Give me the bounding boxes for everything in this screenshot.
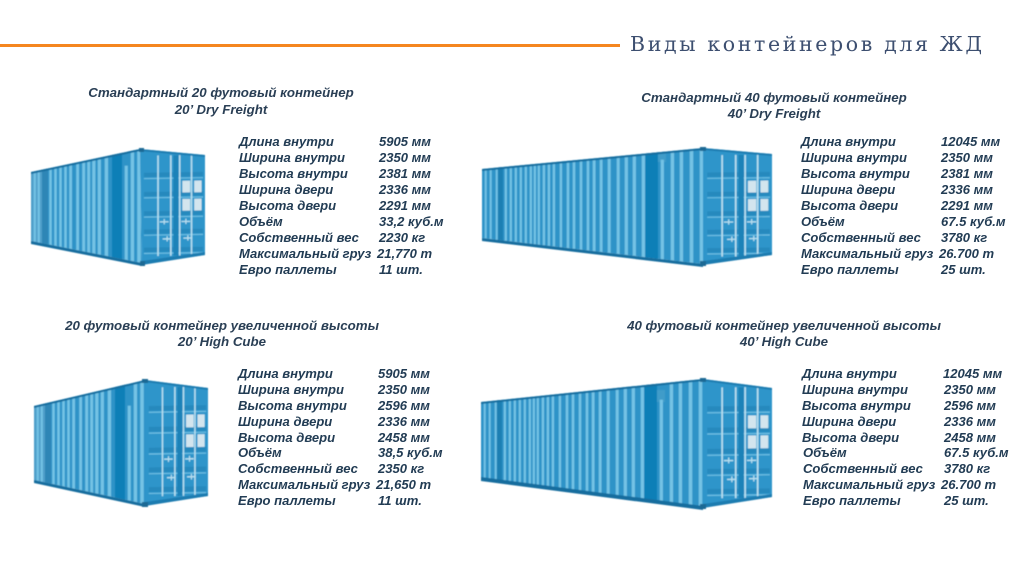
spec table: 20 ft high cube: 11 шт.: [378, 493, 422, 508]
panel: standard 20 ft container: [31, 85, 444, 277]
spec table: 40 ft high cube: 2350 мм: [943, 382, 996, 397]
panel: standard 40 ft container: [482, 90, 1006, 277]
spec table: standard 20 ft: [238, 134, 444, 277]
spec table: standard 20 ft: Ширина двери: [239, 182, 333, 197]
spec table: standard 40 ft: [800, 134, 1006, 277]
spec table: 20 ft high cube: 5905 мм: [378, 366, 430, 381]
spec table: standard 20 ft: Высота внутри: [239, 166, 348, 181]
heading: standard 40 ft: Стандартный 40 футовый контейнер: [641, 90, 907, 105]
spec table: standard 40 ft: 3780 кг: [941, 230, 987, 245]
spec table: 40 ft high cube: Объём: [803, 445, 847, 460]
spec table: standard 20 ft: Длина внутри: [238, 134, 334, 149]
spec table: standard 40 ft: 2291 мм: [940, 198, 993, 213]
spec table: standard 20 ft: Максимальный груз: [239, 246, 372, 261]
spec table: standard 40 ft: Собственный вес: [801, 230, 922, 245]
spec table: standard 20 ft: 5905 мм: [379, 134, 431, 149]
spec table: 20 ft high cube: Ширина внутри: [238, 382, 344, 397]
spec table: 40 ft high cube: 26.700 т: [940, 477, 997, 492]
spec table: standard 40 ft: 12045 мм: [941, 134, 1001, 149]
spec table: 20 ft high cube: Высота внутри: [238, 398, 347, 413]
header rule: [0, 44, 620, 47]
spec table: standard 40 ft: 2381 мм: [940, 166, 993, 181]
spec table: 20 ft high cube: 38,5 куб.м: [378, 445, 443, 460]
spec table: 20 ft high cube: 2350 кг: [377, 461, 424, 476]
spec table: 40 ft high cube: 67.5 куб.м: [944, 445, 1009, 460]
icon: 20 ft high cube container: [34, 379, 208, 510]
spec table: standard 40 ft: Евро паллеты: [801, 262, 899, 277]
spec table: 40 ft high cube: Ширина двери: [802, 414, 896, 429]
heading: standard 20 ft: 20’ Dry Freight: [174, 102, 268, 117]
spec table: 20 ft high cube: Собственный вес: [238, 461, 359, 476]
heading: standard 40 ft: 40’ Dry Freight: [727, 106, 821, 121]
spec table: standard 20 ft: Евро паллеты: [239, 262, 337, 277]
spec table: 40 ft high cube: 12045 мм: [943, 366, 1003, 381]
spec table: 40 ft high cube: Высота внутри: [802, 398, 911, 413]
spec table: 20 ft high cube: Объём: [238, 445, 282, 460]
spec table: 40 ft high cube: Высота двери: [802, 430, 899, 445]
heading: standard 20 ft: Стандартный 20 футовый контейнер: [88, 85, 354, 100]
spec table: 20 ft high cube: 2596 мм: [377, 398, 430, 413]
spec table: 40 ft high cube: Длина внутри: [801, 366, 897, 381]
spec table: 40 ft high cube: 3780 кг: [944, 461, 990, 476]
spec table: 20 ft high cube: [237, 366, 443, 508]
spec table: standard 20 ft: 2350 мм: [378, 150, 431, 165]
spec table: 20 ft high cube: 2336 мм: [377, 414, 430, 429]
heading: 20 ft high cube: 20’ High Cube: [177, 334, 267, 349]
spec table: 40 ft high cube: 2458 мм: [943, 430, 996, 445]
spec table: standard 20 ft: 2381 мм: [378, 166, 431, 181]
spec table: 40 ft high cube: Евро паллеты: [803, 493, 901, 508]
spec table: 20 ft high cube: 2350 мм: [377, 382, 430, 397]
heading: 20 ft high cube: 20 футовый контейнер увеличенной высоты: [64, 318, 380, 333]
heading: 40 ft high cube: 40 футовый контейнер увеличенной высоты: [626, 318, 942, 333]
spec table: 40 ft high cube: 25 шт.: [943, 493, 989, 508]
spec table: 20 ft high cube: Высота двери: [238, 430, 335, 445]
heading: 40 ft high cube: 40’ High Cube: [739, 334, 829, 349]
spec table: 40 ft high cube: 2596 мм: [943, 398, 996, 413]
spec table: standard 40 ft: Длина внутри: [800, 134, 896, 149]
spec table: standard 40 ft: 25 шт.: [940, 262, 986, 277]
spec table: standard 40 ft: 2350 мм: [940, 150, 993, 165]
spec table: standard 20 ft: 2230 кг: [378, 230, 425, 245]
spec table: 40 ft high cube: Ширина внутри: [802, 382, 908, 397]
icon: 40 ft container: [482, 140, 772, 270]
spec table: standard 20 ft: 11 шт.: [379, 262, 423, 277]
spec table: standard 40 ft: 26.700 т: [938, 246, 995, 261]
spec table: 20 ft high cube: Максимальный груз: [238, 477, 371, 492]
spec table: standard 20 ft: 21,770 т: [376, 246, 433, 261]
spec table: standard 40 ft: Максимальный груз: [801, 246, 934, 261]
spec table: standard 40 ft: Высота двери: [801, 198, 898, 213]
spec table: 20 ft high cube: 2458 мм: [377, 430, 430, 445]
spec table: 40 ft high cube: 2336 мм: [943, 414, 996, 429]
spec table: 40 ft high cube: Собственный вес: [803, 461, 924, 476]
panel: 20 ft high cube container: [34, 318, 443, 510]
title: Виды контейнеров для ЖД: [630, 32, 982, 56]
spec table: standard 20 ft: Объём: [239, 214, 283, 229]
panel: 40 ft high cube container: [481, 318, 1009, 510]
spec table: 20 ft high cube: Длина внутри: [237, 366, 333, 381]
spec table: standard 40 ft: Объём: [801, 214, 845, 229]
spec table: 20 ft high cube: Ширина двери: [238, 414, 332, 429]
spec table: standard 20 ft: 33,2 куб.м: [379, 214, 444, 229]
spec table: 40 ft high cube: [801, 366, 1009, 508]
spec table: standard 20 ft: 2336 мм: [378, 182, 431, 197]
icon: 40 ft high cube container: [481, 378, 772, 510]
spec table: standard 20 ft: Высота двери: [239, 198, 336, 213]
spec table: 20 ft high cube: Евро паллеты: [238, 493, 336, 508]
spec table: standard 20 ft: Ширина внутри: [239, 150, 345, 165]
spec table: standard 20 ft: 2291 мм: [378, 198, 431, 213]
spec table: 40 ft high cube: Максимальный груз: [803, 477, 936, 492]
icon: 20 ft container: [31, 140, 205, 270]
spec table: standard 40 ft: 67.5 куб.м: [941, 214, 1006, 229]
spec table: standard 20 ft: Собственный вес: [239, 230, 360, 245]
spec table: standard 40 ft: 2336 мм: [940, 182, 993, 197]
spec table: standard 40 ft: Высота внутри: [801, 166, 910, 181]
spec table: 20 ft high cube: 21,650 т: [375, 477, 432, 492]
spec table: standard 40 ft: Ширина двери: [801, 182, 895, 197]
spec table: standard 40 ft: Ширина внутри: [801, 150, 907, 165]
